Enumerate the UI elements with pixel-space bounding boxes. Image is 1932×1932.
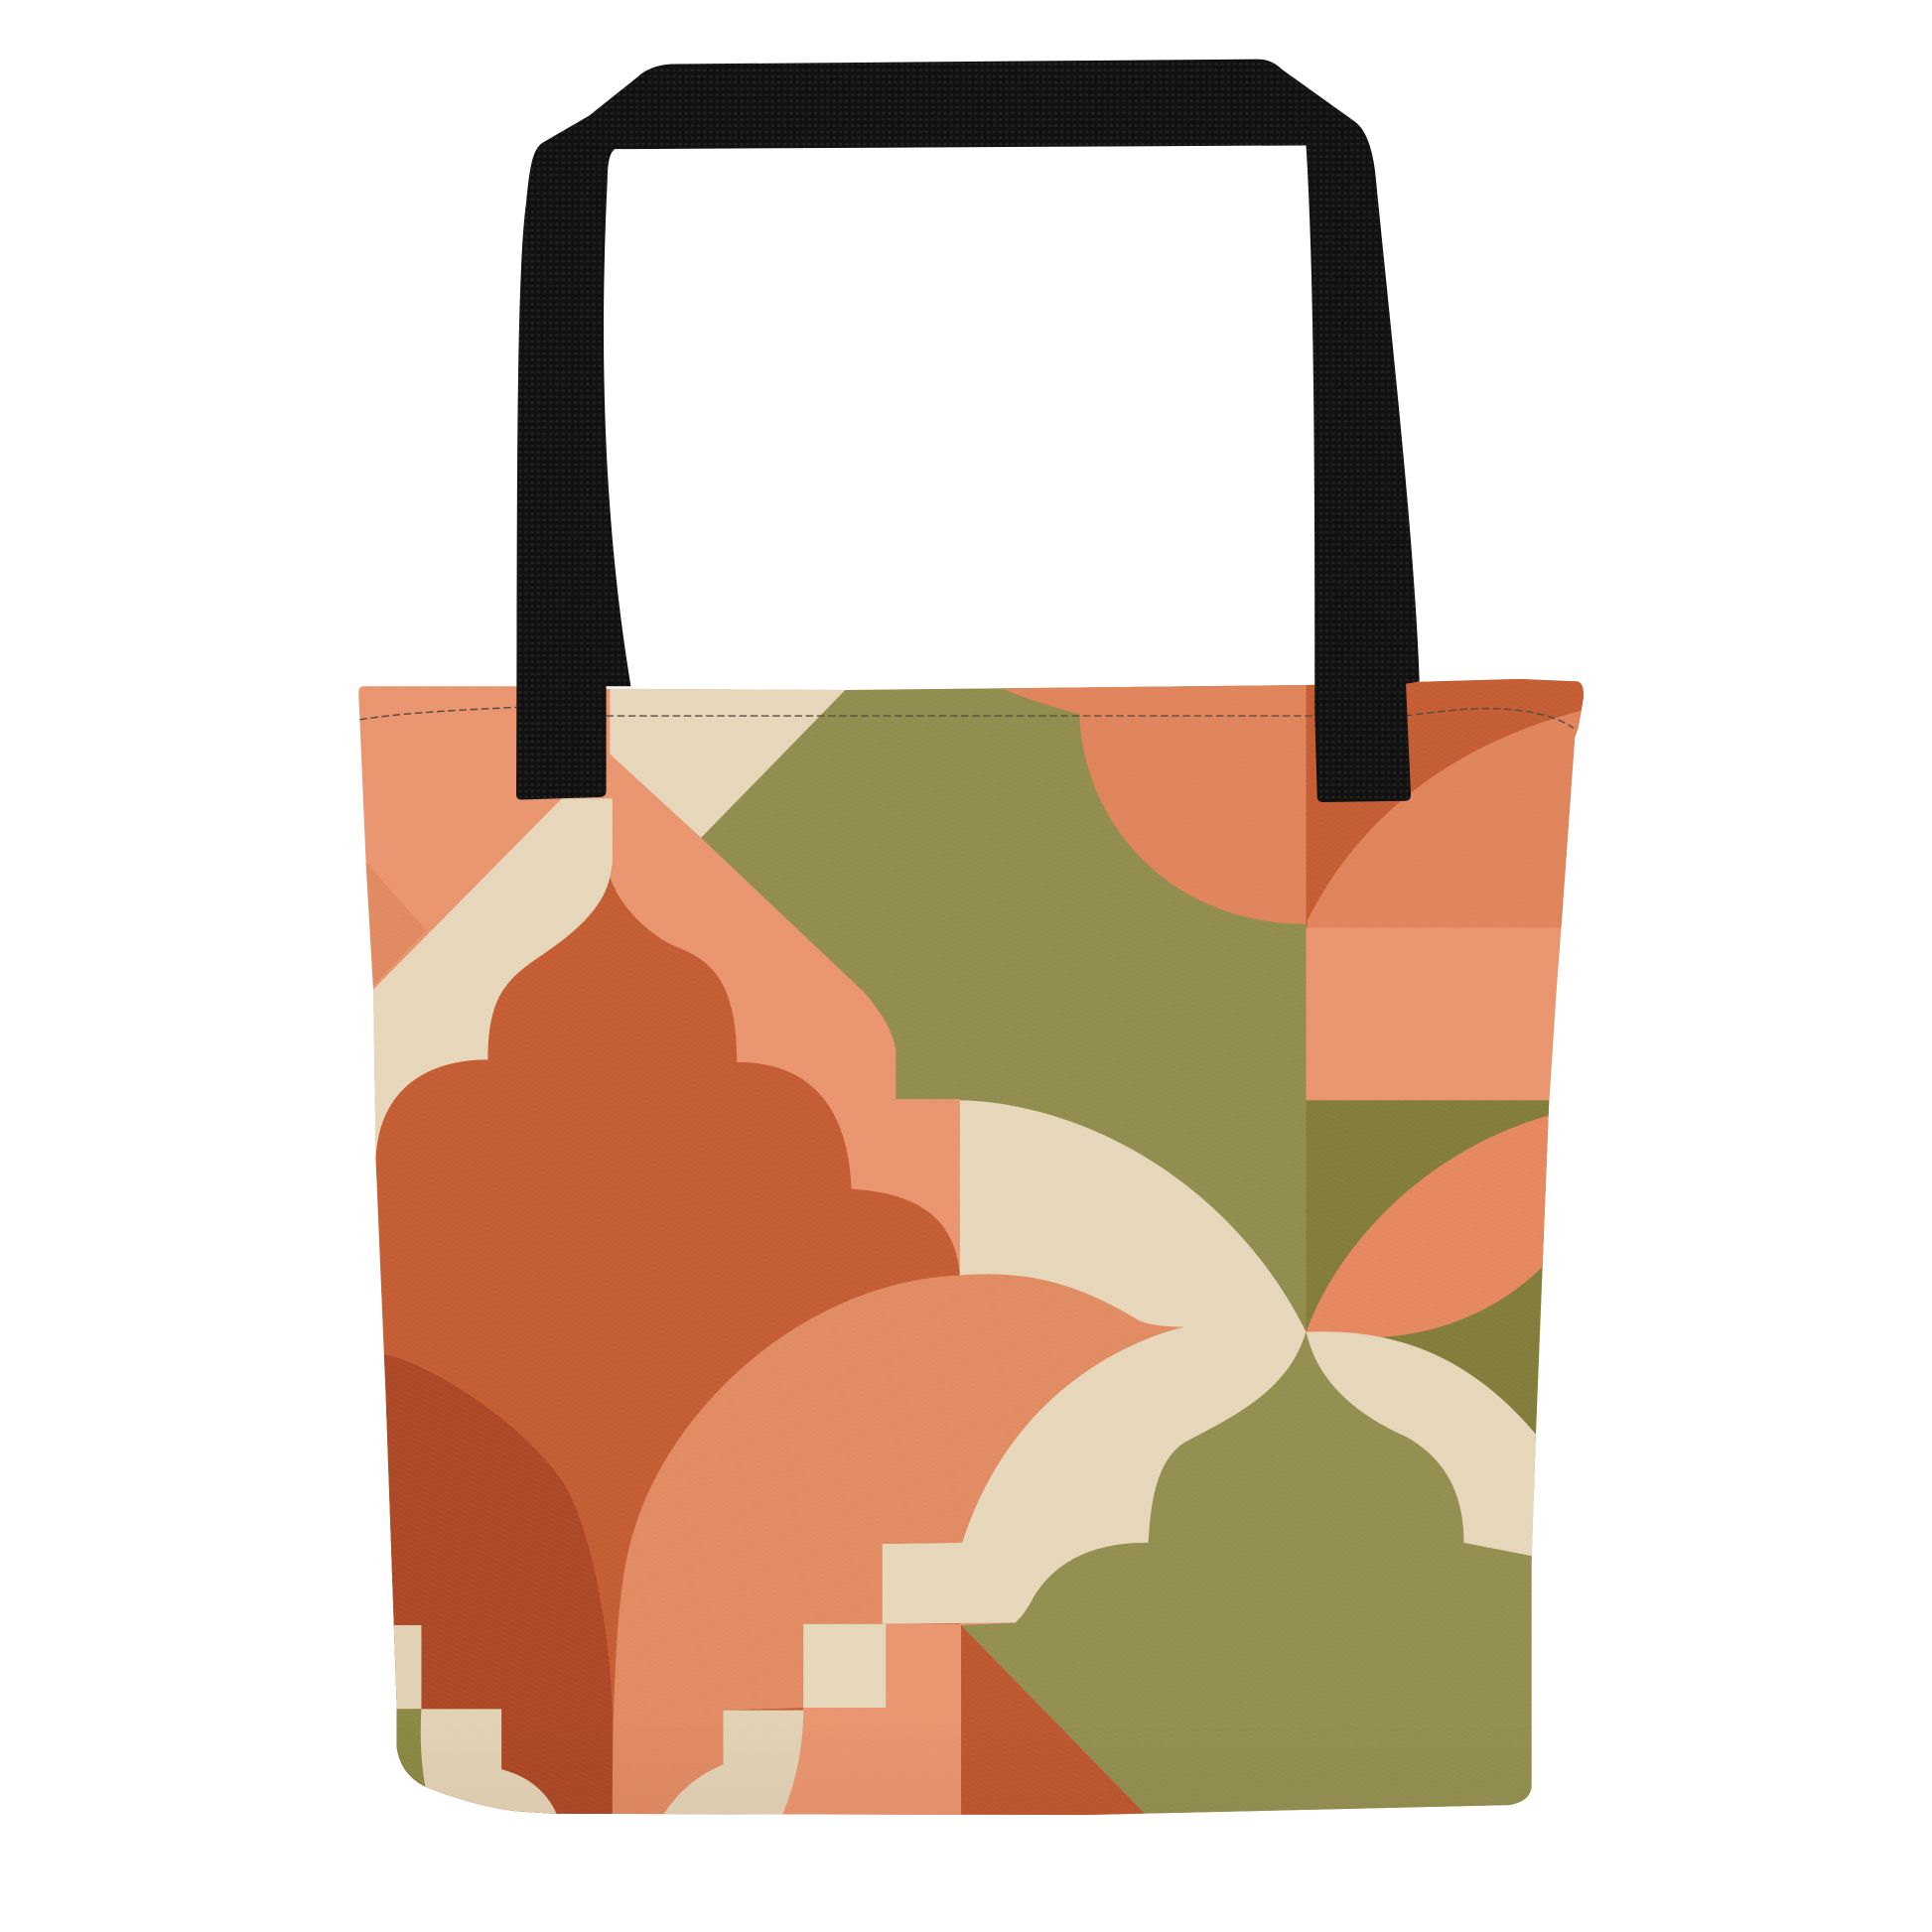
dark olive block right xyxy=(1307,1100,1549,1495)
olive arch lower right xyxy=(961,1332,1565,1818)
bag body xyxy=(345,665,1601,1836)
illustration: tote bag xyxy=(358,60,1584,1815)
cream block bottom left xyxy=(382,1625,421,1709)
cream triangle top xyxy=(610,685,850,838)
cream arc right xyxy=(1307,1331,1565,1565)
orange arch xyxy=(613,1274,1184,1818)
cream foot bottom left xyxy=(421,1709,558,1818)
black webbing handles xyxy=(516,60,1420,802)
fabric texture and bottom shading xyxy=(345,665,1601,1836)
orange leaf middle right xyxy=(1307,1111,1565,1337)
rust top right field xyxy=(1307,671,1601,928)
peach step block bottom xyxy=(776,1624,961,1818)
rust triangle bottom centre xyxy=(961,1625,1149,1818)
rust arch main xyxy=(357,878,960,1818)
olive upper field xyxy=(701,683,1307,1337)
darker peach triangle at left edge xyxy=(365,862,426,987)
cream diagonal band top left xyxy=(357,798,613,1159)
peach block right xyxy=(1549,927,1561,1100)
stitched hem seam xyxy=(359,707,1574,728)
cream square step xyxy=(803,1624,886,1708)
orange leaf top right xyxy=(1308,709,1589,928)
cream foot bottom centre xyxy=(661,1711,803,1818)
orange quarter circle top xyxy=(996,683,1308,924)
cream petal and band centre xyxy=(883,1100,1307,1624)
olive corner bottom left xyxy=(382,1709,425,1799)
dark rust arch xyxy=(383,1354,613,1814)
